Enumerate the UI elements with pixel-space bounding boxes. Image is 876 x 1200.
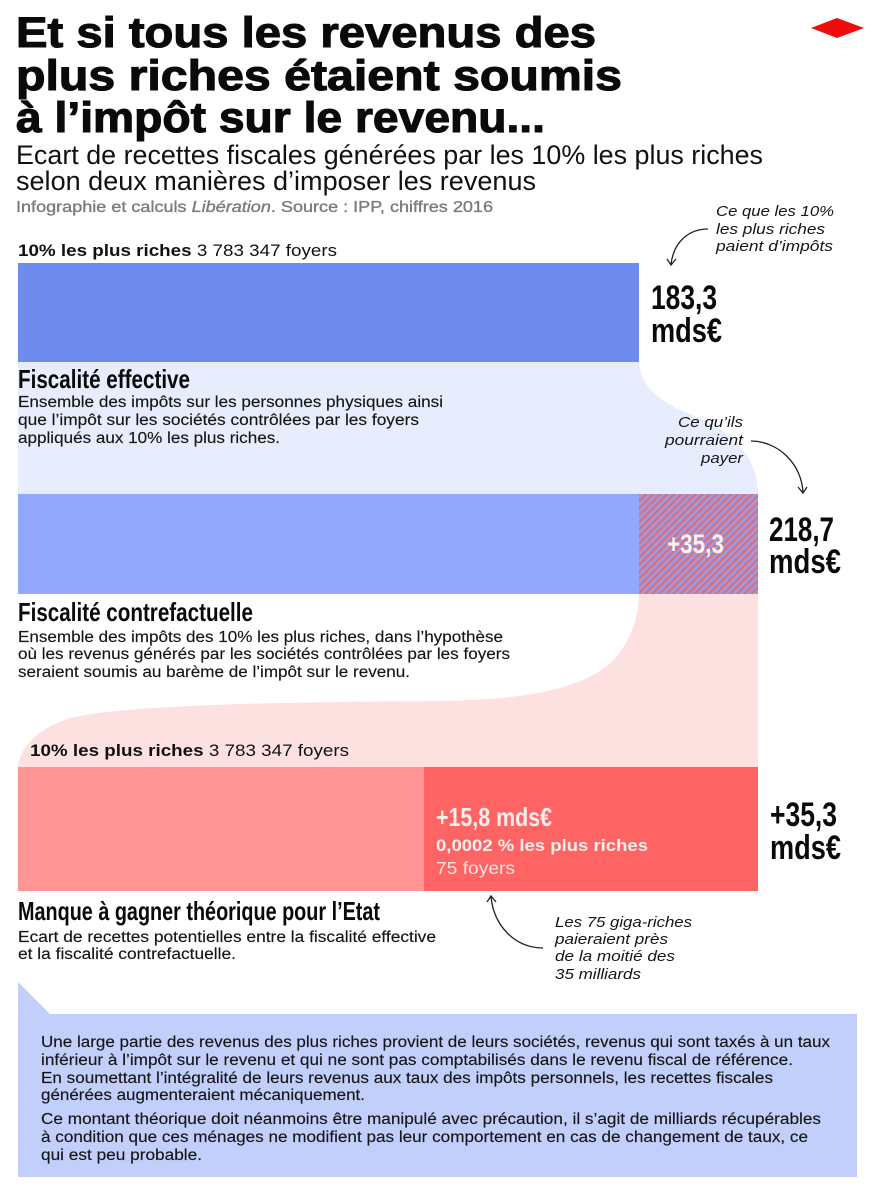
subtitle: Ecart de recettes fiscales générées par les 10% les plus riches: [16, 140, 763, 170]
text: effective taxation: appliqués aux 10% les plus riches.: [18, 430, 280, 447]
bar: shortfall, rest of top 10%: [18, 767, 424, 891]
note: what they could pay: Ce qu’ils: [678, 414, 744, 431]
bar: effective taxation: [18, 263, 639, 362]
text: counterfactual taxation: seraient soumis au barème de l’impôt sur le revenu.: [18, 664, 410, 681]
value: +35,3 mds€: +35,3: [770, 796, 837, 834]
note: 75 giga-rich: 35 milliards: [555, 966, 642, 983]
text: shortfall: [18, 929, 436, 963]
value: 183,3 mds€: mds€: [651, 312, 722, 350]
note: what they pay: [715, 203, 834, 255]
note: 75 giga-rich: paieraient près: [554, 931, 669, 948]
text: explanation: Une large partie des revenus des plus riches provient de leurs sociétés, revenus qui sont taxés à un taux: [41, 1034, 830, 1051]
subtitle: selon deux manières d’imposer les revenus: [16, 166, 536, 196]
arrow: to 75 households: [487, 896, 543, 948]
note: what they pay: les plus riches: [716, 221, 826, 238]
bar: shortfall, 75 households: 75 foyers: [436, 858, 515, 878]
heading: effective taxation: Fiscalité effective: [18, 364, 190, 394]
text: explanation: Ce montant théorique doit néanmoins être manipulé avec précaution, il s’agit de milliards récupérables: [41, 1111, 821, 1128]
text: effective taxation: [18, 394, 443, 447]
arrow: to 183,3: [667, 229, 708, 265]
flow band: red connector: [18, 594, 758, 767]
bar: shortfall, 75 households: +15,8 mds€: [436, 802, 552, 832]
value: 218,7 mds€: mds€: [769, 543, 841, 581]
text: counterfactual taxation: [18, 629, 510, 681]
source line: Infographie et calculs Libération . Source : IPP, chiffres 2016: [16, 199, 493, 216]
note: what they pay: Ce que les 10%: [716, 203, 834, 220]
value: +35,3 mds€: mds€: [770, 829, 841, 867]
bar segment: hatched +35,3: [639, 494, 758, 594]
note: what they could pay: [664, 414, 744, 467]
title: à l’impôt sur le revenu...: [16, 94, 545, 142]
text: explanation: En soumettant l’intégralité de leurs revenus aux taux des impôts personnels, les recettes fiscales: [41, 1070, 773, 1087]
text: effective taxation: Ensemble des impôts sur les personnes physiques ainsi: [18, 394, 443, 411]
heading: shortfall: Manque à gagner théorique pour l’Etat: [18, 896, 380, 926]
text: explanation: générées augmenteraient mécaniquement.: [41, 1087, 365, 1104]
note: 75 giga-rich: Les 75 giga-riches: [555, 914, 693, 931]
note: what they could pay: pourraient: [664, 432, 744, 449]
label: top households: 10% les plus riches 3 783 347 foyers: [18, 241, 337, 260]
value: 183,3 mds€: [651, 279, 722, 350]
bar: shortfall, 75 households: [424, 767, 758, 891]
text: counterfactual taxation: Ensemble des impôts des 10% les plus riches, dans l’hypothèse: [18, 629, 503, 646]
value: 183,3 mds€: 183,3: [651, 279, 717, 317]
arrow: to 218,7: [751, 441, 807, 493]
bar: shortfall, 75 households: 0,0002 % les plus riches: [436, 836, 648, 855]
text: shortfall: et la fiscalité contrefactuelle.: [18, 946, 236, 963]
heading: counterfactual taxation: Fiscalité contrefactuelle: [18, 597, 253, 627]
value: 218,7 mds€: [769, 511, 841, 581]
note: 75 giga-rich: de la moitié des: [555, 948, 676, 965]
text: counterfactual taxation: où les revenus générés par les sociétés contrôlées par les foyers: [18, 646, 510, 663]
subtitle: [16, 140, 763, 196]
panel: explanation: [18, 982, 857, 1177]
value: 218,7 mds€: 218,7: [769, 511, 834, 549]
bar: counterfactual taxation: [18, 494, 639, 594]
note: what they could pay: payer: [700, 450, 744, 467]
icon: red diamond logo: [811, 18, 864, 38]
note: what they pay: paient d’impôts: [715, 238, 834, 255]
text: effective taxation: que l’impôt sur les sociétés contrôlées par les foyers: [18, 412, 419, 429]
text: explanation: inférieur à l’impôt sur le revenu et qui ne sont pas comptabilisés dans le revenu fiscal de référence.: [41, 1052, 793, 1069]
label: bottom households: 10% les plus riches 3 783 347 foyers: [30, 741, 349, 760]
text: shortfall: Ecart de recettes potentielles entre la fiscalité effective: [18, 929, 436, 946]
note: 75 giga-rich: [554, 914, 693, 983]
flow band: blue connector: [18, 362, 758, 494]
value: +35,3 mds€: [770, 796, 841, 867]
text: explanation: à condition que ces ménages ne modifient pas leur comportement en cas de changement de taux, ce: [41, 1129, 808, 1146]
title: plus riches étaient soumis: [16, 52, 622, 100]
text: explanation: [41, 1034, 830, 1164]
title: Et si tous les revenus des: [16, 9, 596, 57]
bar segment: hatched +35,3: +35,3: [667, 529, 724, 559]
title: [16, 9, 622, 142]
text: explanation: qui est peu probable.: [41, 1147, 202, 1164]
